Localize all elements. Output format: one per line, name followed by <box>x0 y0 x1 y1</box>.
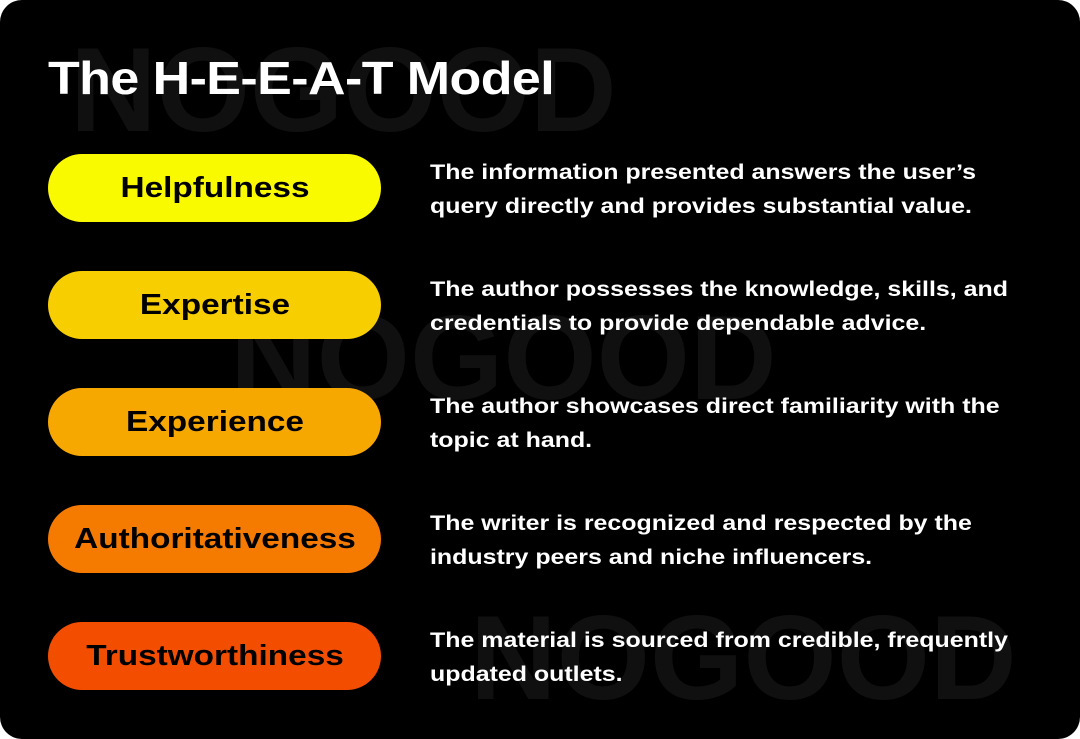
title: The H-E-E-A-T Model <box>48 52 554 104</box>
desc: Experience: topic at hand. <box>430 428 592 452</box>
pill: Experience: Experience <box>126 406 303 438</box>
desc: Authoritativeness: The writer is recognized and respected by the <box>430 511 972 535</box>
desc: Trustworthiness <box>430 628 1008 686</box>
watermark 2: NOGOOD <box>230 291 777 425</box>
desc: Helpfulness: The information presented answers the user’s <box>430 160 976 184</box>
desc: Authoritativeness: industry peers and niche influencers. <box>430 545 872 569</box>
pill: Helpfulness: Helpfulness <box>120 172 309 204</box>
pill: Helpfulness <box>48 154 381 222</box>
pill: Trustworthiness <box>48 622 381 690</box>
desc: Expertise <box>430 277 1008 335</box>
desc: Experience <box>430 394 1000 452</box>
watermark 1: NOGOOD <box>70 23 617 157</box>
pill: Authoritativeness: Authoritativeness <box>74 523 355 555</box>
desc: Helpfulness <box>430 160 976 218</box>
pill: Trustworthiness: Trustworthiness <box>86 640 343 672</box>
desc: Experience: The author showcases direct familiarity with the <box>430 394 1000 418</box>
pill: Authoritativeness <box>48 505 381 573</box>
watermark 3: NOGOOD <box>470 591 1017 725</box>
desc: Expertise: credentials to provide dependable advice. <box>430 311 926 335</box>
pill: Expertise <box>48 271 381 339</box>
desc: Helpfulness: query directly and provides substantial value. <box>430 194 972 218</box>
desc: Trustworthiness: updated outlets. <box>430 662 623 686</box>
pill: Experience <box>48 388 381 456</box>
desc: Expertise: The author possesses the knowledge, skills, and <box>430 277 1008 301</box>
desc: Trustworthiness: The material is sourced from credible, frequently <box>430 628 1008 652</box>
desc: Authoritativeness <box>430 511 972 569</box>
pill: Expertise: Expertise <box>139 289 290 321</box>
